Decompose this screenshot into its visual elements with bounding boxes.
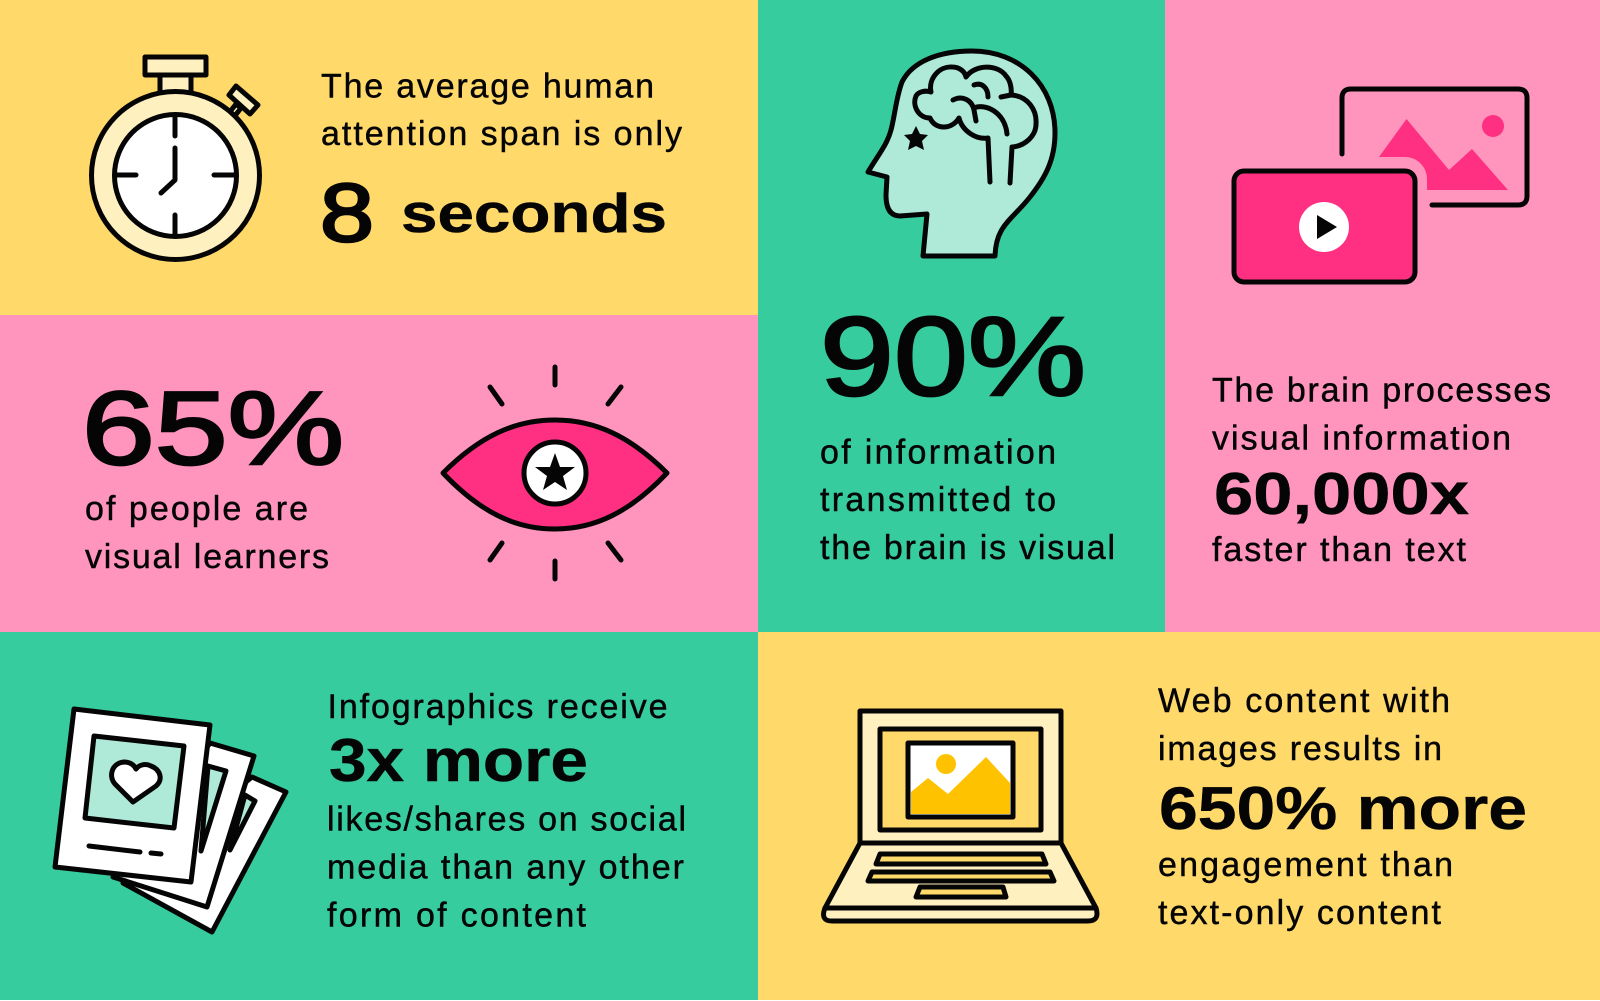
- text: faster than text: faster than text: [1212, 531, 1467, 569]
- text: visual learners: visual learners: [85, 538, 329, 576]
- icon: eye: [443, 367, 667, 579]
- text: attention span intro: The average human: [321, 68, 654, 106]
- text: engagement: engagement than: [1158, 846, 1453, 884]
- stat: 90%: 90%: [820, 294, 1086, 419]
- stat: 650% more: 650% more: [1159, 775, 1527, 842]
- icon: stopwatch: [92, 57, 260, 260]
- panel: web content engagement: [758, 632, 1600, 1000]
- text: web content: Web content with: [1158, 682, 1450, 720]
- text: attention span intro: [321, 68, 682, 153]
- text: engagement: text-only content: [1158, 894, 1442, 932]
- text: web content: [1158, 682, 1450, 768]
- text: visual learners: [85, 490, 329, 576]
- icon: image and video: [1222, 89, 1527, 294]
- text: information is visual: the brain is visual: [820, 529, 1115, 567]
- text: engagement: [1158, 846, 1453, 932]
- text: likes and shares: form of content: [327, 896, 587, 934]
- text: attention span intro: attention span is only: [321, 115, 682, 153]
- text: information is visual: [820, 434, 1115, 567]
- text: information is visual: of information: [820, 434, 1056, 472]
- text: likes and shares: media than any other: [327, 848, 684, 886]
- stat: 60,000x: 60,000x: [1214, 461, 1469, 527]
- text: brain processes: visual information: [1212, 420, 1511, 458]
- icon: stack of photos: [55, 709, 286, 932]
- stat: 8 seconds: 8: [320, 166, 374, 259]
- icon: head with brain: [868, 51, 1055, 256]
- text: likes and shares: likes/shares on social: [327, 800, 686, 838]
- panel: visual learners: [0, 315, 758, 632]
- text: likes and shares: [327, 800, 686, 934]
- text: web content: images results in: [1158, 730, 1442, 768]
- panel: brain statistic: [758, 0, 1165, 632]
- panel: infographics engagement: [0, 632, 758, 1000]
- stat: 8 seconds: [320, 166, 667, 259]
- stat: 3x more: 3x more: [329, 727, 588, 794]
- icon: laptop: [824, 711, 1097, 921]
- text: infographics receive: Infographics receive: [328, 688, 668, 726]
- text: brain processes: [1212, 372, 1551, 458]
- stat: 8 seconds: seconds: [401, 182, 667, 244]
- stat: 65%: 65%: [82, 371, 344, 487]
- text: information is visual: transmitted to: [820, 481, 1056, 519]
- text: brain processes: The brain processes: [1212, 372, 1551, 410]
- panel: processing speed: [1165, 0, 1600, 632]
- panel: attention span: [0, 0, 758, 315]
- text: visual learners: of people are: [85, 490, 308, 528]
